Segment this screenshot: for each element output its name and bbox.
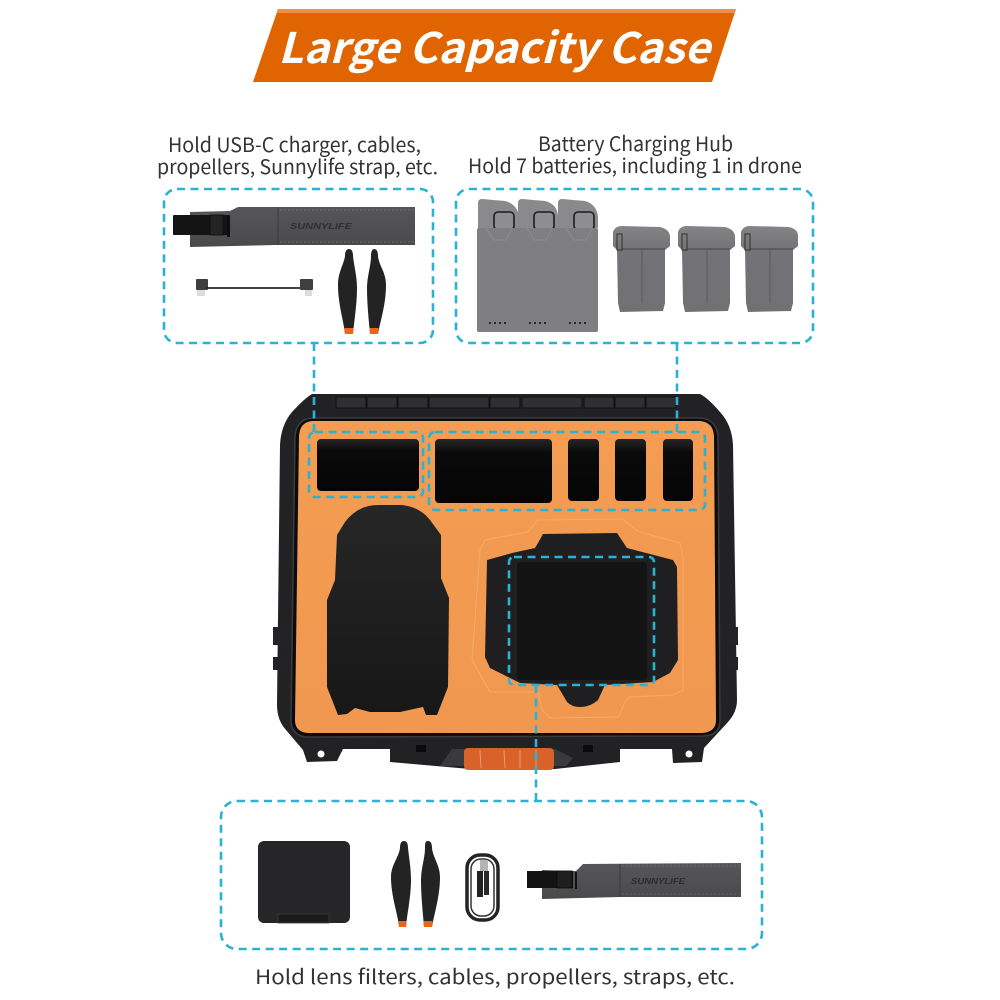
dashed highlight: controller lid storage: [509, 557, 654, 685]
cutout: drone: [327, 505, 449, 715]
icon: battery 2: [678, 226, 735, 312]
icon: propellers: [391, 841, 440, 927]
panel: accessories top left: [164, 189, 433, 343]
controller inner recess: [517, 562, 647, 680]
hinge strip: [336, 397, 676, 408]
icon: neck strap: SUNNYLIFE: [631, 877, 686, 886]
orange foam insert: [295, 421, 716, 733]
icon: lens filter case: [258, 841, 350, 923]
case: [273, 394, 738, 770]
dashed highlight: battery compartment: [429, 432, 705, 510]
cutout: charging hub: [435, 439, 552, 503]
caption: bottom compartment: Hold lens filters, cables, propellers, straps, etc.: [255, 961, 735, 990]
icon: battery 1: [613, 226, 670, 312]
case body: [277, 394, 737, 769]
icon: neck strap: [173, 207, 415, 247]
connector line: top right: [676, 343, 678, 432]
panel: battery hub: [456, 189, 813, 343]
icon: coiled cable: [467, 855, 498, 920]
dashed highlight: accessory compartment: [309, 432, 423, 497]
connector line: top left: [313, 343, 315, 432]
title banner: Large Capacity Case: [278, 15, 714, 76]
icon: charging hub with three batteries: [477, 199, 598, 332]
icon: battery 3: [741, 226, 798, 312]
controller foam outline: [472, 519, 683, 718]
mount holes: [318, 750, 692, 758]
side latches: [273, 627, 738, 670]
icon: neck strap: SUNNYLIFE: [290, 222, 353, 231]
caption: battery charging hub: [468, 128, 802, 179]
carry handle: [440, 748, 573, 770]
connector line: bottom: [535, 685, 537, 801]
front plate slots: [416, 745, 593, 752]
caption: top left compartment: [157, 129, 438, 180]
cutout: remote controller: [485, 533, 678, 707]
panel: accessories bottom: [221, 801, 762, 949]
icon: neck strap: [527, 863, 741, 899]
caption: top left compartment: propellers, Sunnylife strap, etc.: [157, 151, 438, 180]
cutout: battery slot 2: [615, 439, 646, 501]
icon: propellers: [338, 249, 386, 334]
caption: battery charging hub: Hold 7 batteries, including 1 in drone: [468, 150, 802, 179]
foam rim: [291, 418, 720, 737]
cutout: battery slot 1: [568, 439, 599, 501]
caption: battery charging hub: Battery Charging Hub: [538, 128, 733, 157]
cutout: accessories: [317, 439, 419, 491]
icon: USB-C cable: [196, 279, 313, 296]
cutout: battery slot 3: [663, 439, 693, 501]
caption: top left compartment: Hold USB-C charger, cables,: [168, 129, 421, 158]
